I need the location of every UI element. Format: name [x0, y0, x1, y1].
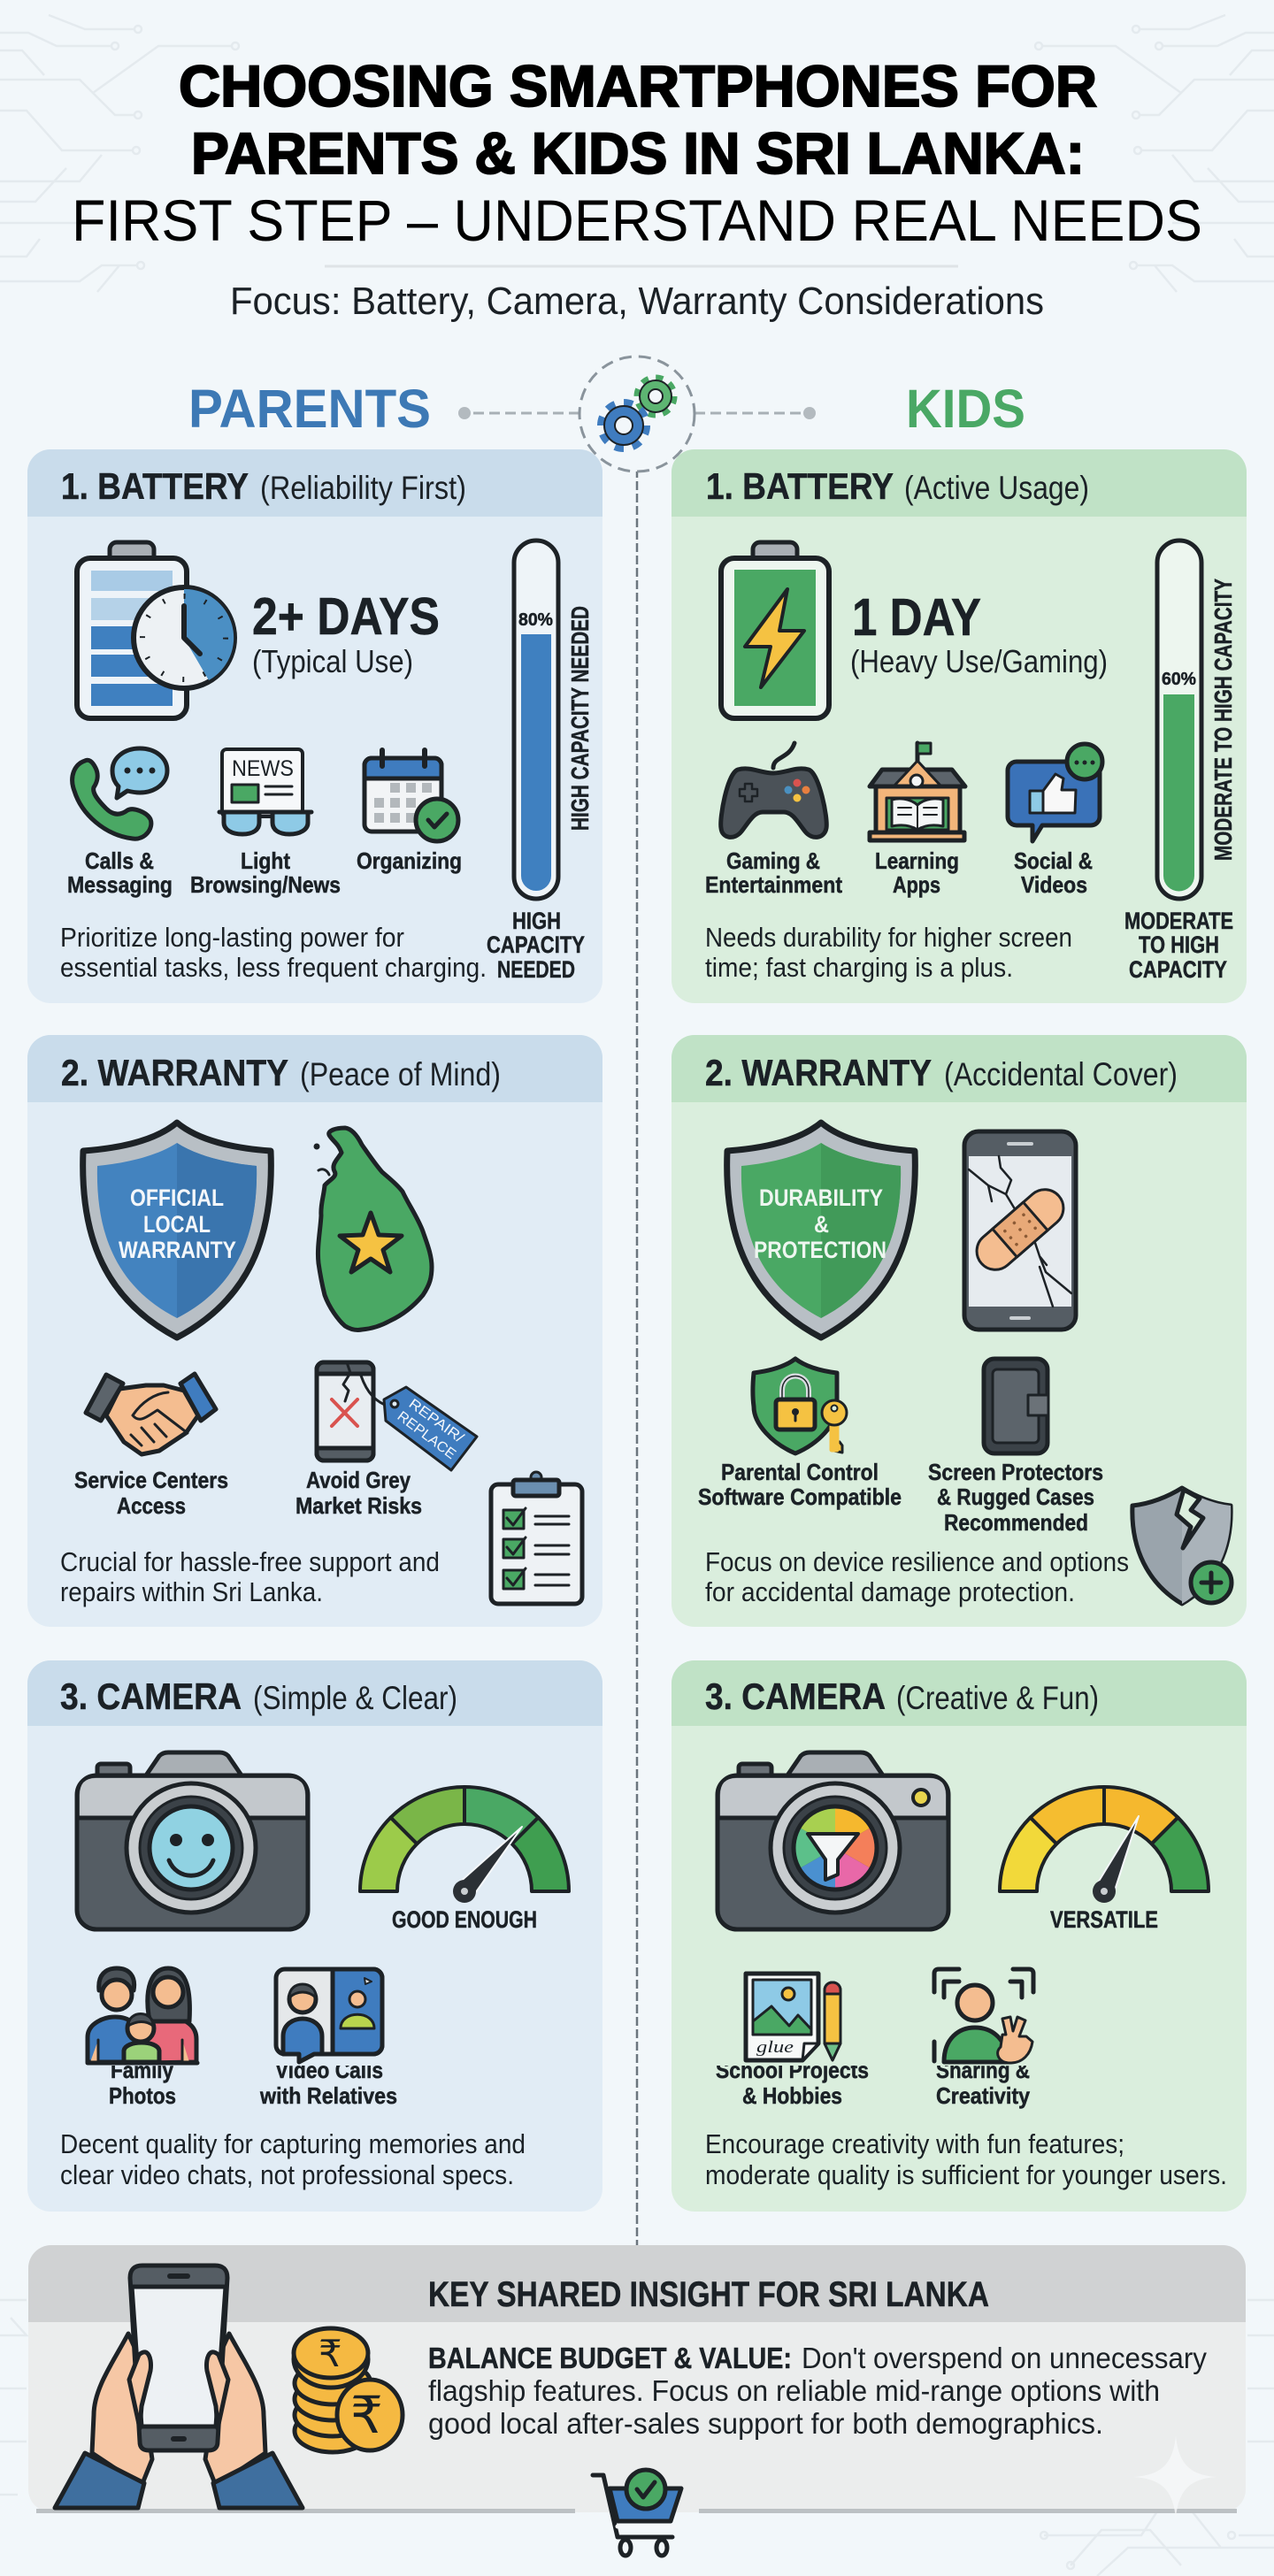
- description: Crucial for hassle-free support and: [60, 1546, 440, 1577]
- center dashed divider: [636, 469, 638, 2245]
- description: Decent quality for capturing memories and: [60, 2128, 526, 2159]
- labels: camera uses: School Projects: [716, 2057, 869, 2083]
- labels: battery uses: Videos: [1021, 871, 1087, 898]
- panel: parents camera: [27, 1660, 602, 2212]
- labels: battery uses: Entertainment: [705, 871, 842, 898]
- description: essential tasks, less frequent charging.: [60, 952, 487, 983]
- labels: camera uses: & Hobbies: [742, 2082, 842, 2109]
- icon: game controller: [721, 743, 826, 837]
- icon: warranty shield: LOCAL: [143, 1211, 211, 1238]
- panel: kids warranty: [672, 1035, 1247, 1627]
- title: PARENTS & KIDS IN SRI LANKA:: [191, 120, 1085, 186]
- capacity caption: [1124, 908, 1233, 983]
- subtitle: Focus: Battery, Camera, Warranty Considerations: [230, 280, 1044, 323]
- icon: phone and chat bubble: [73, 748, 167, 839]
- gauge: versatile: [1000, 1787, 1209, 1933]
- icon: phone with repair tag: REPAIR/: [406, 1396, 466, 1446]
- icon: parental control lock and key: [753, 1359, 847, 1453]
- labels: warranty benefits: & Rugged Cases: [937, 1484, 1094, 1510]
- heading: key shared insight: KEY SHARED INSIGHT FOR SRI LANKA: [428, 2275, 989, 2314]
- labels: warranty benefits: Screen Protectors: [928, 1459, 1103, 1485]
- heading: kids: KIDS: [906, 379, 1025, 439]
- icon: school and book: [870, 743, 965, 840]
- capacity caption: MODERATE: [1124, 908, 1233, 934]
- labels: battery uses: Apps: [893, 871, 940, 898]
- heading: parents warranty: [61, 1052, 501, 1093]
- big stat: 2+ days: (Typical Use): [252, 643, 413, 679]
- icon: durability shield: [727, 1123, 915, 1338]
- heading: kids camera: 3. CAMERA: [705, 1675, 886, 1717]
- heading: parents: PARENTS: [188, 379, 431, 439]
- capacity bar 60%: [1157, 540, 1237, 899]
- labels: warranty benefits: Parental Control: [721, 1459, 879, 1485]
- capacity caption: NEEDED: [497, 956, 575, 983]
- labels: battery uses: Gaming &: [726, 847, 820, 874]
- heading: kids battery: 1. BATTERY: [706, 465, 894, 507]
- labels: battery uses: Calls &: [85, 847, 154, 874]
- description: [60, 2128, 526, 2190]
- icon: school project photo and pencil: [746, 1974, 840, 2060]
- description: repairs within Sri Lanka.: [60, 1576, 323, 1607]
- heading: kids battery: [706, 465, 1089, 507]
- heading: parents battery: 1. BATTERY: [61, 465, 249, 507]
- icon: rugged case: [984, 1359, 1048, 1453]
- icon: rupee coins: ₹: [350, 2385, 383, 2445]
- labels: warranty benefits: Service Centers: [74, 1467, 228, 1493]
- labels: camera uses: Photos: [109, 2082, 176, 2109]
- icon: battery with bolt: [721, 542, 829, 718]
- icon: durability shield: &: [814, 1211, 829, 1238]
- icon: durability shield: PROTECTION: [754, 1237, 886, 1263]
- insight text: [428, 2342, 1207, 2440]
- labels: battery uses: [705, 847, 1093, 898]
- heading: kids warranty: [705, 1052, 1178, 1093]
- icon: phone with repair tag: [317, 1362, 477, 1470]
- icon: social like bubble: [1008, 744, 1102, 841]
- labels: warranty benefits: [698, 1459, 1103, 1536]
- big stat: 1 day: 1 DAY: [852, 588, 981, 647]
- icon: cracked phone with bandage: [964, 1131, 1076, 1330]
- heading: parents warranty: 2. WARRANTY: [61, 1052, 288, 1093]
- icon: checklist clipboard: [491, 1472, 582, 1604]
- labels: warranty benefits: Avoid Grey: [306, 1467, 411, 1493]
- gauge: good enough: GOOD ENOUGH: [392, 1906, 537, 1933]
- icon: newspaper and glasses: [219, 749, 311, 834]
- gauge: good enough: [360, 1787, 569, 1933]
- labels: camera uses: [84, 2049, 403, 2109]
- description: clear video chats, not professional specs.: [60, 2159, 514, 2190]
- big stat: 1 day: (Heavy Use/Gaming): [850, 643, 1108, 679]
- capacity caption: CAPACITY: [1129, 956, 1227, 983]
- heading: parents camera: (Simple & Clear): [253, 1680, 457, 1716]
- icon: durability shield: DURABILITY: [759, 1184, 883, 1211]
- labels: warranty benefits: [74, 1467, 422, 1519]
- title: [72, 53, 1202, 253]
- icon: warranty shield: WARRANTY: [119, 1237, 236, 1263]
- capacity bar 80%: 80%: [518, 610, 553, 630]
- description: [705, 922, 1072, 983]
- gauge: versatile: VERSATILE: [1050, 1906, 1158, 1933]
- icon: handshake: [86, 1374, 216, 1454]
- labels: battery uses: Social &: [1014, 847, 1093, 874]
- icon: warranty shield: [83, 1123, 271, 1338]
- labels: camera uses: Sharing &: [936, 2057, 1030, 2083]
- labels: battery uses: Organizing: [357, 847, 462, 874]
- labels: camera uses: Family: [111, 2057, 173, 2083]
- capacity bar 60%: 60%: [1162, 670, 1196, 689]
- labels: camera uses: [708, 2049, 1044, 2109]
- heading: kids battery: (Active Usage): [904, 470, 1089, 506]
- labels: camera uses: Video Calls: [275, 2057, 383, 2083]
- title: FIRST STEP – UNDERSTAND REAL NEEDS: [72, 188, 1202, 253]
- description: Encourage creativity with fun features;: [705, 2128, 1124, 2159]
- icon: camera with smile lens: [77, 1752, 308, 1929]
- labels: battery uses: [67, 847, 462, 898]
- description: [60, 922, 487, 983]
- capacity bar 60%: MODERATE TO HIGH CAPACITY: [1209, 579, 1237, 861]
- insight text: good local after-sales support for both demographics.: [428, 2407, 1103, 2440]
- panel: key shared insight: [28, 2245, 1246, 2513]
- icon: warranty shield: OFFICIAL: [130, 1184, 224, 1211]
- icon: blue gear: [601, 402, 647, 448]
- description: Needs durability for higher screen: [705, 922, 1072, 953]
- icon: green gear: [637, 378, 674, 415]
- panel: kids battery: [672, 449, 1247, 1003]
- panel: parents warranty: [27, 1035, 602, 1627]
- icon: camera with color filter lens: [718, 1752, 948, 1929]
- labels: battery uses: Light: [241, 847, 290, 874]
- icon: video call: [276, 1969, 382, 2062]
- labels: battery uses: Messaging: [67, 871, 173, 898]
- description: [705, 2128, 1227, 2190]
- capacity caption: CAPACITY: [487, 932, 585, 958]
- icon: phone with repair tag: REPLACE: [395, 1409, 458, 1462]
- heading: kids warranty: (Accidental Cover): [944, 1056, 1178, 1092]
- heading: kids camera: (Creative & Fun): [896, 1680, 1099, 1716]
- big stat: 2+ days: 2+ DAYS: [252, 587, 440, 646]
- description: [705, 1546, 1129, 1607]
- panel: kids camera: [672, 1660, 1247, 2212]
- icon: rupee coins: ₹: [318, 2332, 342, 2375]
- description: time; fast charging is a plus.: [705, 952, 1013, 983]
- labels: camera uses: Creativity: [936, 2082, 1030, 2109]
- description: moderate quality is sufficient for younger users.: [705, 2159, 1227, 2190]
- insight text: Don't overspend on unnecessary: [802, 2342, 1207, 2374]
- icon: selfie peace sign: [934, 1969, 1033, 2063]
- labels: warranty benefits: Access: [117, 1492, 186, 1519]
- description: for accidental damage protection.: [705, 1576, 1075, 1607]
- center gears emblem: [458, 356, 816, 472]
- icon: battery with clock: [77, 542, 234, 718]
- capacity bar 80%: HIGH CAPACITY NEEDED: [566, 606, 594, 831]
- capacity bar 80%: [514, 540, 594, 899]
- icon: school project photo and pencil: glue: [756, 2038, 794, 2057]
- description: Focus on device resilience and options: [705, 1546, 1129, 1577]
- labels: camera uses: with Relatives: [259, 2082, 397, 2109]
- heading: parents battery: (Reliability First): [260, 470, 466, 506]
- labels: warranty benefits: Software Compatible: [698, 1484, 902, 1510]
- icon: family: [88, 1968, 197, 2063]
- watermark sparkle: [1133, 2435, 1216, 2518]
- insight text: BALANCE BUDGET & VALUE:: [428, 2342, 792, 2374]
- capacity caption: TO HIGH: [1139, 932, 1219, 958]
- labels: battery uses: Learning: [875, 847, 959, 874]
- icon: rupee coins: [294, 2328, 403, 2452]
- heading: parents camera: 3. CAMERA: [60, 1675, 242, 1717]
- heading: parents battery: [61, 465, 466, 507]
- icon: hands holding phone: [55, 2266, 303, 2508]
- labels: warranty benefits: Market Risks: [295, 1492, 422, 1519]
- panel: parents battery: [27, 449, 602, 1003]
- heading: kids camera: [705, 1675, 1099, 1717]
- description: [60, 1546, 440, 1607]
- heading: parents camera: [60, 1675, 457, 1717]
- heading: kids warranty: 2. WARRANTY: [705, 1052, 932, 1093]
- title: CHOOSING SMARTPHONES FOR: [179, 53, 1097, 119]
- icon: Sri Lanka map with star: [313, 1128, 432, 1330]
- icon: broken shield with plus: [1132, 1488, 1232, 1604]
- big stat: 2+ days: [252, 587, 440, 679]
- icon: newspaper and glasses: NEWS: [232, 756, 294, 781]
- labels: warranty benefits: Recommended: [944, 1509, 1088, 1536]
- description: Prioritize long-lasting power for: [60, 922, 404, 953]
- capacity caption: [487, 908, 585, 983]
- labels: battery uses: Browsing/News: [190, 871, 341, 898]
- icon: calendar: [365, 750, 458, 841]
- icon: shopping cart with check: [593, 2470, 681, 2556]
- capacity caption: HIGH: [512, 908, 561, 934]
- heading: parents warranty: (Peace of Mind): [300, 1056, 501, 1092]
- insight text: flagship features. Focus on reliable mid-range options with: [428, 2374, 1160, 2407]
- big stat: 1 day: [850, 588, 1108, 679]
